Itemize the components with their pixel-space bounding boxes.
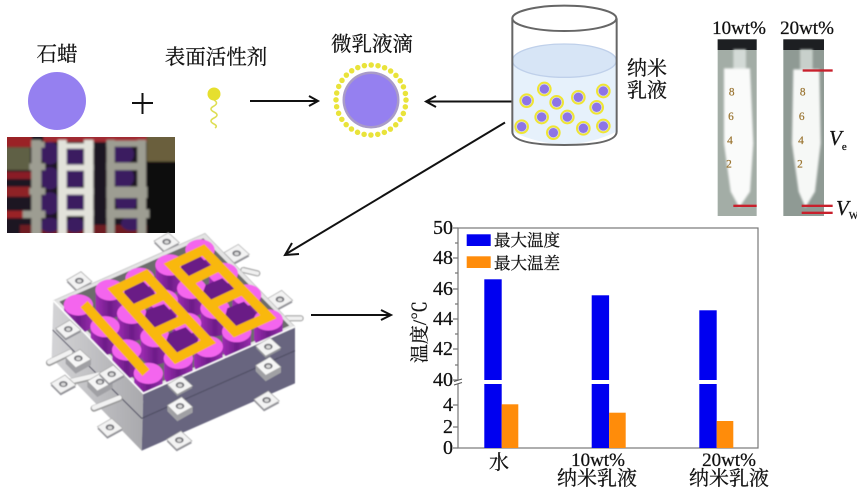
- tube: 10wt%: [718, 39, 757, 216]
- tube: 20wt%: 2: [797, 158, 803, 170]
- axis break: [454, 379, 462, 385]
- heading: paraffin: 石蜡: [36, 43, 78, 66]
- icon: paraffin sphere: [28, 72, 86, 130]
- bars: max temperature: [484, 279, 717, 448]
- diagram: battery pack: [49, 233, 301, 451]
- case walls: [52, 301, 295, 451]
- heading: surfactant: 表面活性剂: [165, 45, 267, 69]
- icon: beaker of nanoemulsion: [512, 6, 617, 145]
- tube: 20wt%: 4: [798, 135, 804, 147]
- tube: 20wt%: 6: [799, 111, 805, 123]
- arrow: nanoemulsion to battery pack: [285, 122, 505, 255]
- x-axis labels: 水: [489, 451, 509, 474]
- label: Ve: V: [829, 126, 844, 150]
- label: 20wt%: 20wt%: [780, 18, 834, 39]
- icon: surfactant molecule: [208, 88, 220, 128]
- heading: microemulsion droplet: 微乳液滴: [331, 33, 413, 56]
- chart: max temperature and temperature difference: [409, 217, 769, 490]
- label: 10wt%: 10wt%: [712, 18, 766, 39]
- plot frame: [458, 228, 758, 448]
- y-axis labels: [433, 217, 453, 459]
- heading: nanoemulsion: 纳米: [627, 57, 667, 80]
- tube: 10wt%: 2: [726, 158, 732, 170]
- y-axis labels: 0: [443, 437, 453, 459]
- case top: [53, 233, 295, 393]
- orange bus bars: [84, 250, 268, 373]
- y-axis labels: 50: [433, 217, 453, 239]
- tube: 20wt%: [783, 39, 833, 216]
- y-axis labels: 44: [433, 308, 453, 330]
- photo: battery module: [7, 137, 175, 233]
- front tabs and pipes: [49, 320, 281, 451]
- y-axis title: 温度/℃: [409, 301, 431, 363]
- rear tabs: [67, 233, 301, 318]
- y-axis labels: 2: [443, 416, 453, 438]
- icon: microemulsion droplet: [336, 65, 406, 135]
- y-axis labels: 48: [433, 247, 453, 269]
- arrow: battery pack to chart: [311, 310, 391, 320]
- x-axis labels: 20wt%: [702, 450, 756, 471]
- tube: 20wt%: 8: [800, 87, 806, 99]
- battery cells: [64, 239, 283, 401]
- frame windows: [124, 255, 256, 354]
- x-axis labels: 10wt%: [571, 450, 625, 471]
- arrow: beaker to droplet: [426, 96, 527, 107]
- y-axis labels: 40: [433, 369, 453, 391]
- legend: 最大温差: [494, 254, 560, 273]
- bars: max temperature difference: [502, 404, 733, 448]
- tube: 10wt%: 8: [729, 87, 735, 99]
- tube: 10wt%: 4: [727, 135, 733, 147]
- x-axis labels: 纳米乳液: [689, 467, 769, 490]
- test tubes: [712, 18, 857, 222]
- y-axis labels: 42: [433, 338, 453, 360]
- arrow: surfactant to droplet: [250, 96, 318, 106]
- y-axis labels: 4: [443, 394, 453, 416]
- heading: nanoemulsion second line: 乳液: [627, 79, 667, 102]
- x-axis labels: [489, 450, 769, 490]
- icon: plus sign: [132, 93, 153, 114]
- label: Ve: e: [842, 141, 847, 153]
- label: Vw: V: [836, 196, 851, 220]
- y-axis labels: 46: [433, 278, 453, 300]
- axis ticks: [453, 228, 458, 448]
- tube: 10wt%: 6: [728, 111, 734, 123]
- nanoemulsion droplets: [514, 82, 611, 140]
- x-axis labels: 纳米乳液: [557, 467, 637, 490]
- legend: 最大温度: [494, 231, 560, 250]
- legend: [467, 231, 560, 273]
